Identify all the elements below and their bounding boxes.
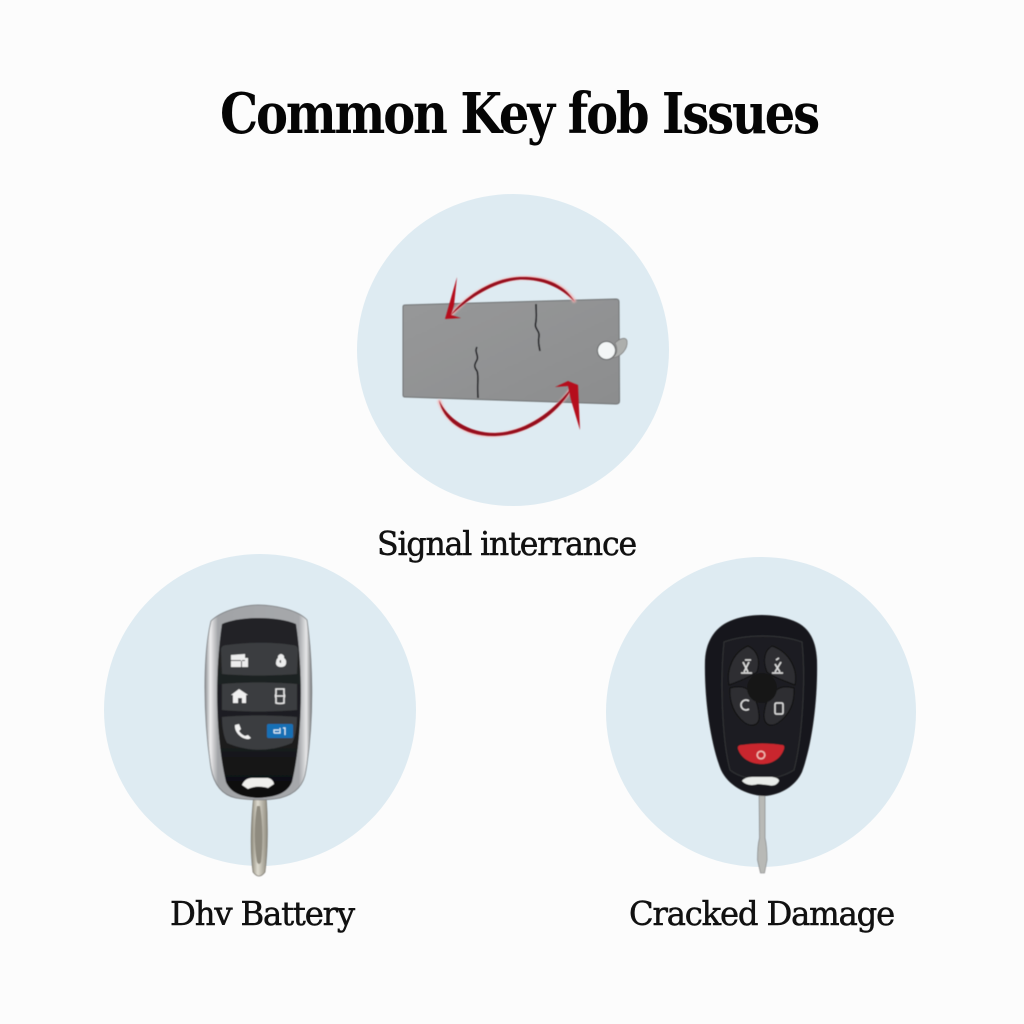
circle background: battery bbox=[104, 554, 416, 866]
center button bbox=[747, 673, 777, 703]
bottom arrow head bbox=[555, 381, 580, 430]
panel: battery bbox=[104, 554, 416, 933]
arrow: bottom red arrow bbox=[439, 381, 580, 436]
circle background: signal bbox=[357, 194, 669, 506]
icon: refresh glyph bbox=[741, 700, 749, 710]
icon: top left glyph bbox=[741, 660, 752, 673]
crack right bbox=[535, 304, 540, 351]
blue button glyph bbox=[274, 728, 285, 735]
icon: home bbox=[231, 689, 248, 703]
top arrow shaft bbox=[449, 277, 575, 317]
inner panel bbox=[722, 636, 804, 779]
top arrow head bbox=[445, 277, 461, 319]
key blade bbox=[758, 782, 767, 873]
title: Common Key fob Issues bbox=[220, 81, 819, 147]
button row 1 bbox=[221, 643, 298, 676]
icon: padlock bbox=[276, 654, 286, 667]
button row 3 bbox=[222, 716, 297, 750]
silver frame bbox=[205, 605, 312, 800]
icon: map bbox=[231, 654, 248, 667]
icon: silver key fob bbox=[205, 605, 312, 876]
blue button bbox=[267, 724, 293, 738]
icon: lock glyph bbox=[775, 703, 783, 714]
panel: cracked damage bbox=[606, 557, 916, 933]
red panic button bbox=[738, 744, 784, 764]
ring slot bbox=[255, 806, 262, 864]
label: damage: Cracked Damage bbox=[629, 894, 894, 933]
key ring bbox=[251, 794, 267, 876]
icon: top right glyph bbox=[772, 658, 783, 673]
arrow: top red arrow bbox=[445, 277, 575, 319]
button bottom right bbox=[764, 687, 794, 725]
icon: phone bbox=[235, 724, 251, 739]
tag body bbox=[403, 299, 620, 404]
label: signal: Signal interrance bbox=[377, 524, 636, 563]
button top right bbox=[765, 646, 796, 685]
black body bbox=[217, 618, 301, 798]
bottom arrow halo bbox=[439, 385, 574, 435]
button row 2 bbox=[222, 682, 297, 712]
icon: car lock bbox=[276, 689, 284, 704]
fob body bbox=[705, 615, 817, 796]
button top left bbox=[728, 646, 759, 685]
top arrow halo bbox=[449, 278, 575, 317]
key loop slot bbox=[742, 777, 779, 786]
tag hole bbox=[598, 342, 616, 360]
circle background: damage bbox=[606, 557, 916, 867]
label: battery: Dhv Battery bbox=[170, 894, 356, 933]
key loop slot bbox=[242, 778, 274, 789]
icon: black key fob bbox=[705, 615, 817, 873]
icon: cracked grey tag bbox=[403, 299, 627, 404]
button bottom left bbox=[730, 687, 759, 725]
crack left bbox=[475, 347, 478, 398]
panel: signal interference bbox=[357, 194, 669, 563]
panic glyph bbox=[757, 751, 765, 759]
bottom arrow shaft bbox=[439, 385, 574, 436]
tag loop bbox=[612, 338, 627, 358]
